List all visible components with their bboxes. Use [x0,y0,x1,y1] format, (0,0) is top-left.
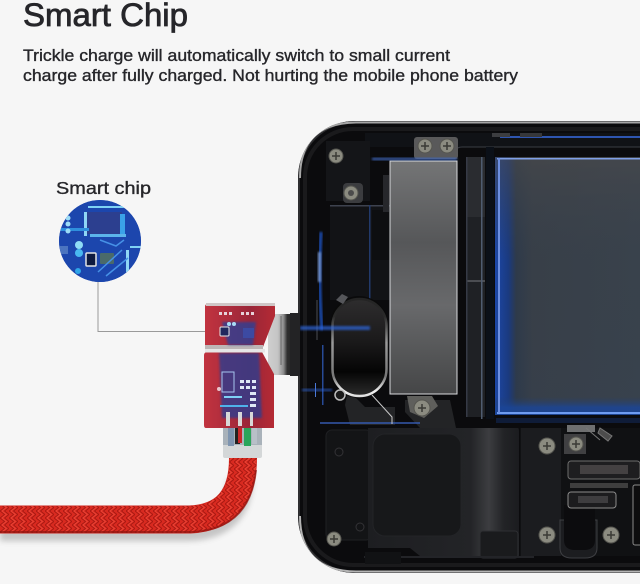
lower red connector block [204,352,274,428]
chip magnifier circle [59,200,142,282]
braided red cable [0,458,256,532]
description text: Trickle charge will automatically switch to small current [23,47,450,65]
small parts around button [335,294,348,400]
metal plate [372,137,458,394]
left top block [326,141,390,300]
phone internals [298,121,640,573]
description text: charge after fully charged. Not hurting the mobile phone battery [23,67,519,85]
speaker module [364,428,534,564]
description text [23,47,519,85]
clear sleeve with wires [223,428,262,458]
left edge blue glow [316,232,324,405]
phone body [298,121,640,573]
logic board bottom right [520,425,640,558]
leader line [98,282,205,332]
cable shadow [0,480,240,528]
lower left box [326,430,372,540]
screws [327,139,619,546]
home button [330,296,388,398]
magnetic connector tip [268,313,300,376]
top internal frame [365,133,640,159]
centre column [466,147,494,419]
small callout label: Smart chip [56,178,151,198]
battery [495,157,640,423]
plate mount below [320,394,456,428]
blue signal flare [300,326,370,397]
upper red connector block [205,303,275,352]
